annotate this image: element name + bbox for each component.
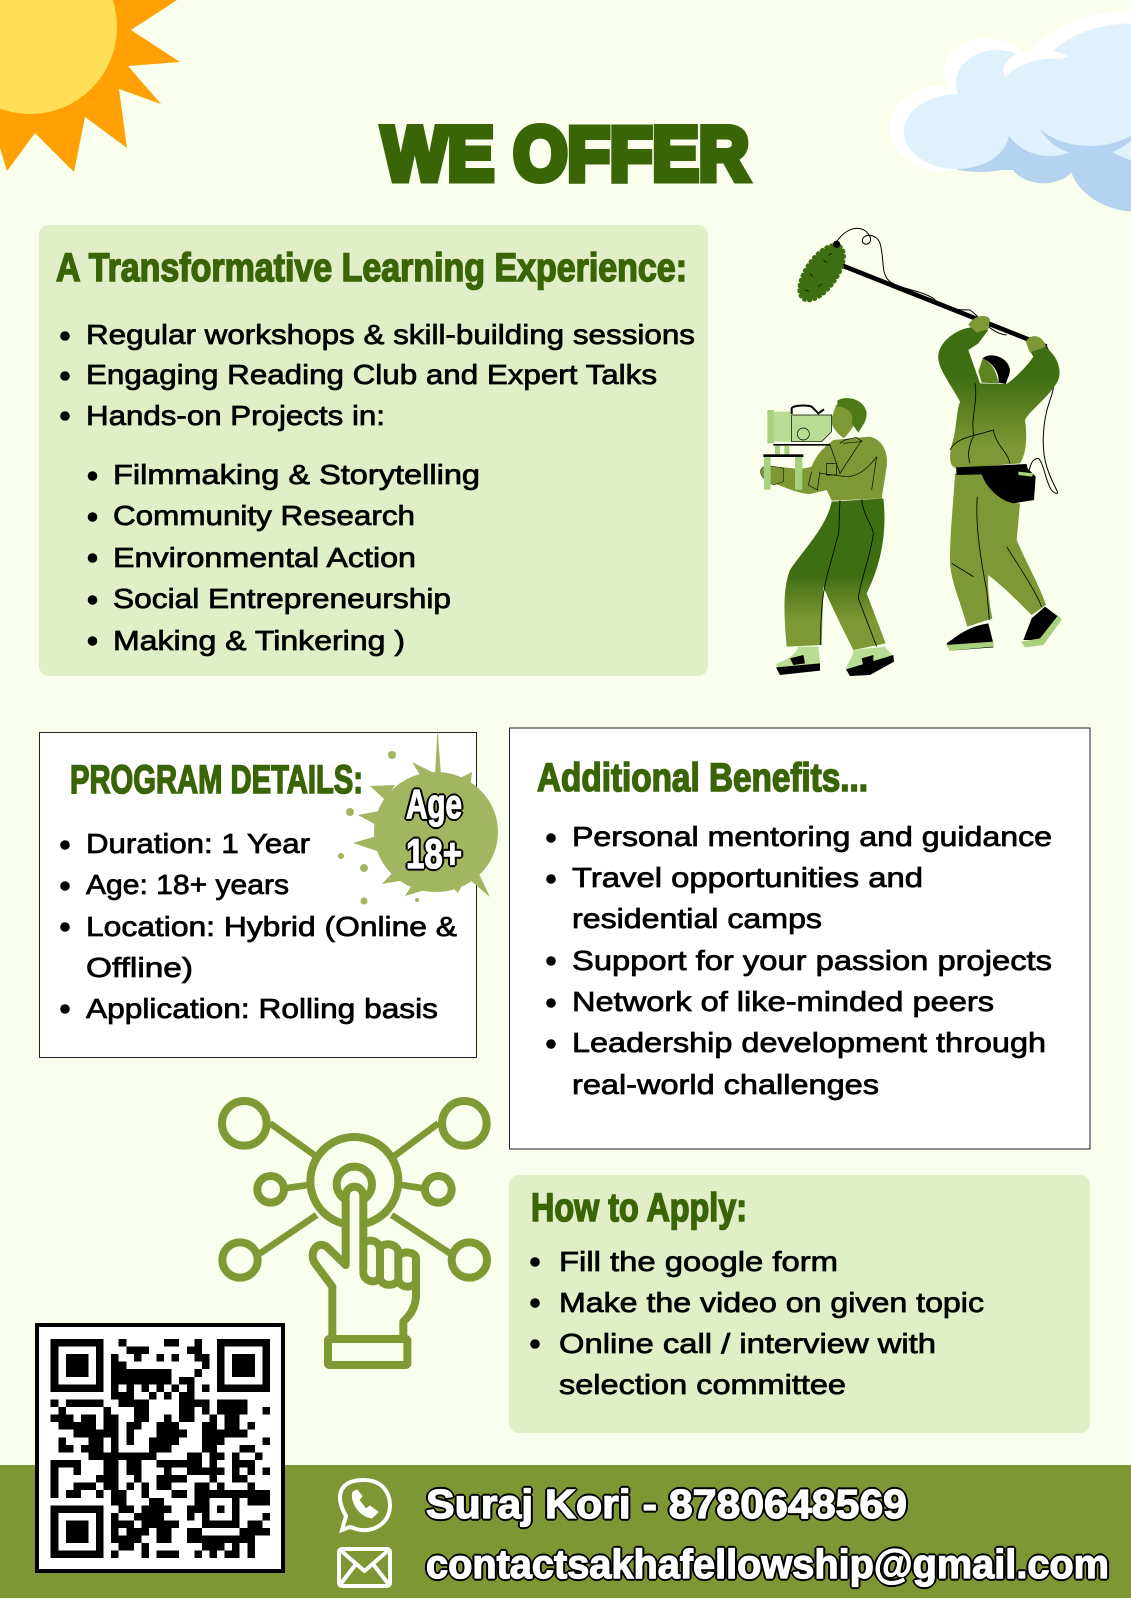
list: project areas: [88, 459, 480, 656]
heading: how to apply: How to Apply:: [531, 1186, 747, 1230]
list: program details: Application: Rolling basis: [86, 993, 438, 1024]
list: application steps: Online call / interview with: [559, 1328, 936, 1359]
list: program details: Age: 18+ years: [86, 869, 289, 900]
title: WE OFFER: [382, 112, 749, 197]
list: benefits: Network of like-minded peers: [572, 986, 994, 1017]
heading: learning experience: A Transformative Learning Experience:: [56, 246, 687, 290]
contact: email: contactsakhafellowship@gmail.com: [426, 1541, 1109, 1587]
panel: how to apply: [509, 1175, 1090, 1433]
list: program details: [60, 828, 457, 1024]
list: benefits: residential camps: [572, 903, 822, 934]
list: benefits: real-world challenges: [572, 1069, 879, 1100]
QR code: [37, 1325, 283, 1571]
illustration: sun: [0, 0, 180, 172]
icon: envelope: [339, 1549, 390, 1586]
list: learning formats: Regular workshops & skill-building sessions: [86, 319, 695, 350]
list: learning formats: Engaging Reading Club and Expert Talks: [86, 359, 657, 390]
panel: additional benefits: [510, 728, 1090, 1149]
badge text: 18+: 18+: [406, 830, 462, 877]
panel: program details: [40, 732, 476, 1058]
list: program details: Offline): [86, 952, 193, 983]
list: learning formats: [60, 319, 695, 431]
camera operator: [761, 398, 894, 676]
list: benefits: Leadership development through: [572, 1027, 1046, 1058]
list: project areas: Environmental Action: [113, 542, 416, 573]
list: project areas: Filmmaking & Storytelling: [113, 459, 480, 490]
panel: learning experience: [39, 225, 708, 676]
footer band: [0, 1465, 1131, 1598]
list: benefits: Travel opportunities and: [572, 862, 923, 893]
list: application steps: Make the video on given topic: [559, 1287, 984, 1318]
boom operator: [791, 228, 1062, 651]
contact: name and phone: Suraj Kori - 8780648569: [426, 1481, 907, 1527]
badge text: age: Age: [406, 781, 462, 827]
list: program details: Location: Hybrid (Online &: [86, 911, 457, 942]
heading: program details: PROGRAM DETAILS:: [70, 758, 363, 802]
list: application steps: selection committee: [559, 1369, 846, 1400]
list: application steps: [530, 1246, 984, 1400]
list: benefits: Support for your passion projects: [572, 945, 1052, 976]
list: benefits: [546, 821, 1052, 1100]
list: application steps: Fill the google form: [559, 1246, 838, 1277]
illustration: cloud: [890, 12, 1131, 212]
list: benefits: Personal mentoring and guidance: [572, 821, 1052, 852]
badge: age 18+ splash: [338, 728, 498, 904]
list: project areas: Social Entrepreneurship: [113, 583, 451, 614]
list: learning formats: Hands-on Projects in:: [86, 400, 385, 431]
illustration: film crew: [761, 228, 1062, 676]
list: project areas: Community Research: [113, 500, 415, 531]
list: program details: Duration: 1 Year: [86, 828, 310, 859]
icon: hand touching network: [222, 1101, 487, 1365]
icon: phone: [340, 1480, 390, 1530]
heading: additional benefits: Additional Benefits...: [537, 756, 868, 800]
list: project areas: Making & Tinkering ): [113, 625, 405, 656]
